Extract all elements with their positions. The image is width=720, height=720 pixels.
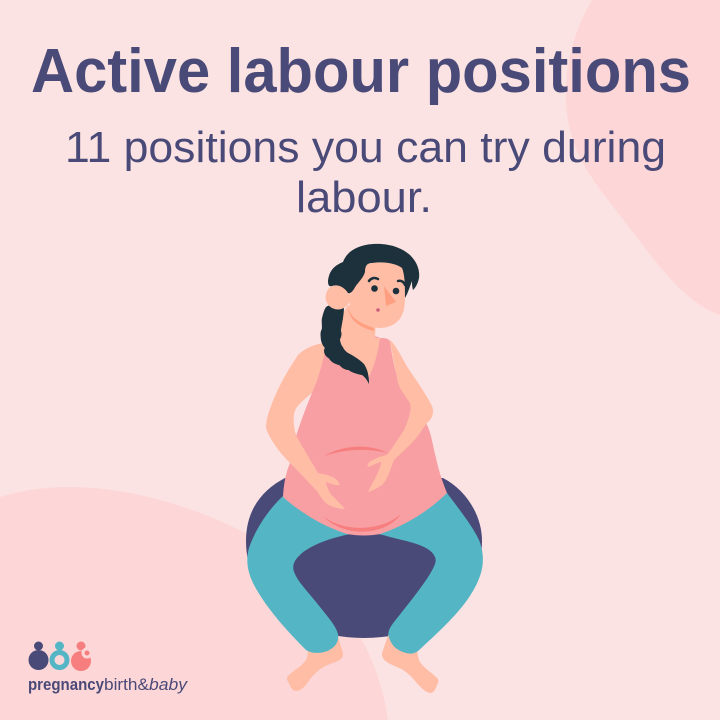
- braid: [320, 305, 369, 384]
- illustration: pregnant woman on birthing ball: [246, 244, 483, 693]
- ear: [326, 284, 350, 310]
- title: Active labour positions: [31, 37, 691, 106]
- logo wordmark: [28, 675, 189, 694]
- belly lines: [324, 447, 401, 532]
- subtitle: [65, 123, 666, 222]
- background blob: bottom left: [0, 487, 388, 720]
- eyebrows: [369, 278, 405, 285]
- logo icon: [28, 642, 92, 671]
- face: [350, 262, 405, 328]
- left arm: [266, 343, 345, 509]
- background blob: top right: [566, 0, 720, 315]
- hair: [328, 244, 419, 298]
- subtitle: labour.: [296, 173, 432, 222]
- nose: [384, 286, 396, 306]
- neck and chest: [323, 305, 380, 379]
- neck shadow: [348, 308, 374, 331]
- birthing ball: [246, 478, 482, 638]
- logo wordmark: baby: [149, 675, 189, 694]
- leggings: [247, 493, 483, 654]
- right arm: [368, 340, 433, 492]
- mouth: [376, 308, 380, 312]
- feet: [287, 630, 438, 693]
- eyes: [371, 285, 399, 294]
- tank top: [283, 336, 447, 536]
- subtitle: 11 positions you can try during: [65, 123, 666, 172]
- logo: pregnancy birth & baby: [28, 642, 189, 694]
- logo wordmark: birth&: [104, 675, 150, 694]
- logo wordmark: pregnancy: [28, 675, 104, 694]
- head: [326, 244, 419, 331]
